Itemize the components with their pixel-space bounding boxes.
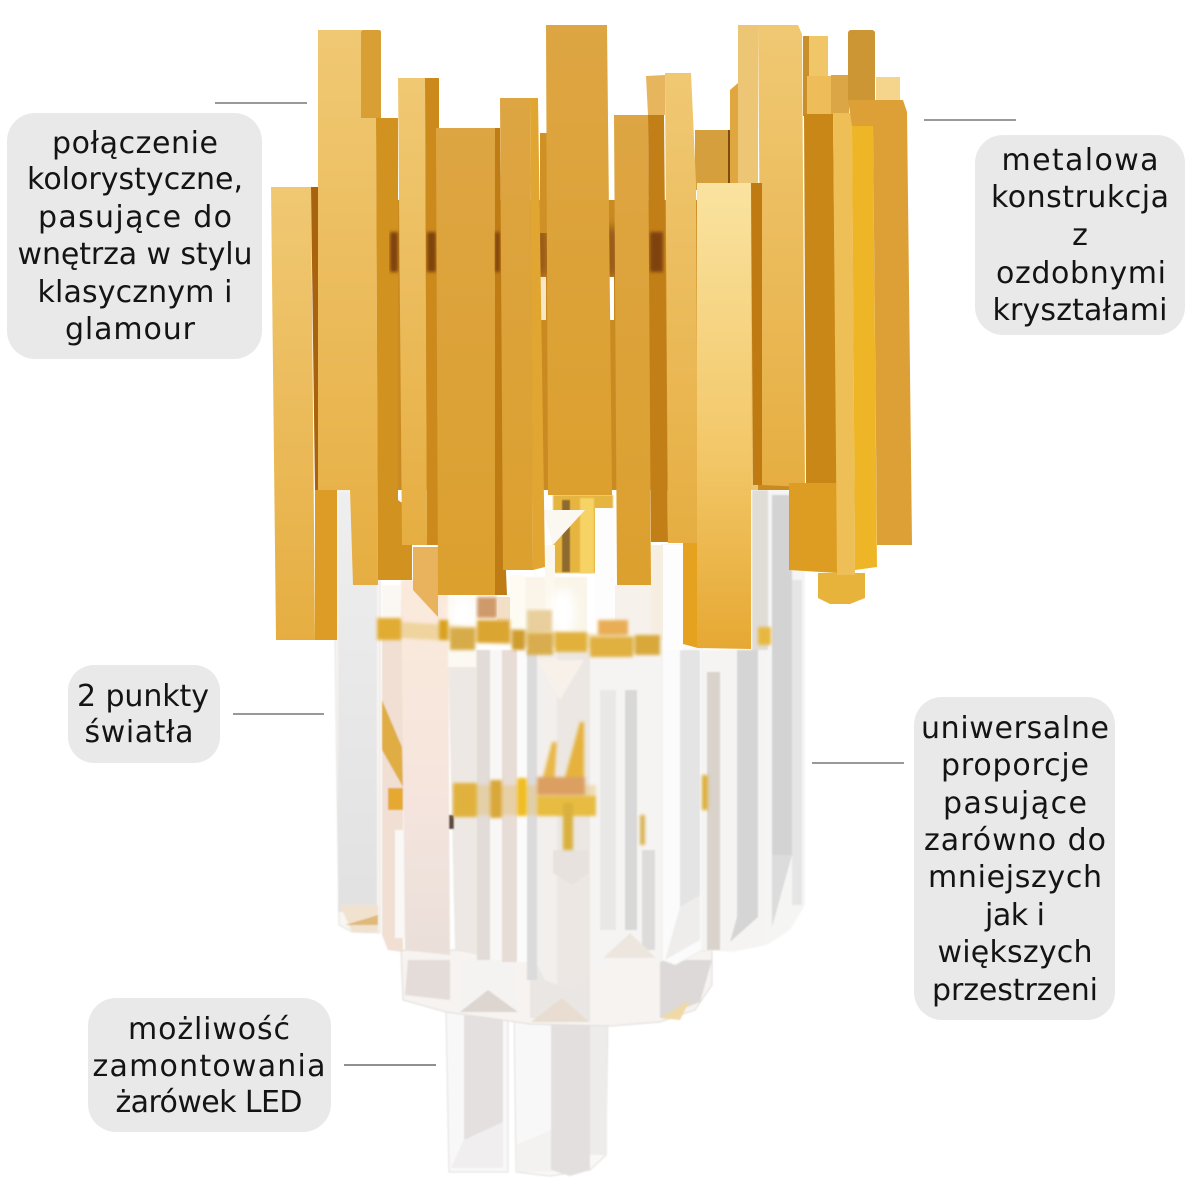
center prisms xyxy=(537,650,596,990)
callout: metal construction xyxy=(975,135,1185,335)
gold ring lower and frame xyxy=(453,722,708,850)
leader line: LED bulbs xyxy=(344,1064,436,1066)
gold bars front row right xyxy=(614,25,912,649)
callout: metal construction: z xyxy=(1072,218,1088,253)
crystal tier 3 (bottom prisms) xyxy=(446,1005,608,1176)
crystal tier 1 (main prisms) xyxy=(333,490,805,990)
callout: colour combination: glamour xyxy=(65,312,196,347)
bulbs and interior glow xyxy=(413,495,683,650)
callout: universal proportions: uniwersalne xyxy=(921,711,1109,746)
wall lamp illustration xyxy=(271,25,912,1176)
callout: LED bulbs: żarówek LED xyxy=(116,1085,302,1120)
callout: metal construction: konstrukcja xyxy=(991,180,1169,215)
callout: colour combination: klasycznym i xyxy=(38,275,232,310)
crystal tier 2 (middle prisms) xyxy=(401,950,712,1026)
callout: two light points xyxy=(68,665,220,763)
leader line: universal proportions xyxy=(812,762,904,764)
callout: metal construction: kryształami xyxy=(992,293,1168,328)
callout: colour combination: pasujące do xyxy=(38,200,232,235)
callout: universal proportions: proporcje xyxy=(941,748,1089,783)
callout: LED bulbs: zamontowania xyxy=(92,1049,326,1084)
center right prisms xyxy=(590,640,662,975)
prism far left xyxy=(333,490,380,933)
callout: colour combination: wnętrza w stylu xyxy=(18,237,252,272)
callout: colour combination: kolorystyczne, xyxy=(27,162,243,197)
right white prism xyxy=(662,545,702,965)
callout: universal proportions: pasujące xyxy=(943,786,1087,821)
callout: colour combination xyxy=(7,113,262,359)
callout: two light points: światła xyxy=(84,715,194,750)
callout: metal construction: ozdobnymi xyxy=(996,256,1166,291)
callout: LED bulbs: możliwość xyxy=(128,1012,290,1047)
gold ring upper xyxy=(377,618,771,657)
callout: universal proportions: jak i xyxy=(984,898,1045,933)
gold bars back row xyxy=(380,30,900,490)
callout: LED bulbs xyxy=(88,998,331,1132)
callout: universal proportions xyxy=(914,697,1115,1020)
callout: two light points: 2 punkty xyxy=(77,679,209,714)
callout: colour combination: połączenie xyxy=(52,126,218,161)
leader line: colour combination xyxy=(215,102,307,104)
callout: universal proportions: przestrzeni xyxy=(932,973,1098,1008)
callout: universal proportions: większych xyxy=(938,935,1092,970)
callout: universal proportions: mniejszych xyxy=(928,860,1102,895)
leader line: metal construction xyxy=(924,119,1016,121)
peach prism with gold diagonal xyxy=(382,585,407,952)
center left prisms xyxy=(448,597,537,980)
large pink prism xyxy=(401,580,450,955)
callout: universal proportions: zarówno do xyxy=(924,823,1106,858)
right grey prisms xyxy=(702,490,805,952)
callout: metal construction: metalowa xyxy=(1002,143,1158,178)
leader line: two light points xyxy=(233,713,324,715)
gold bars front row left xyxy=(271,25,612,640)
